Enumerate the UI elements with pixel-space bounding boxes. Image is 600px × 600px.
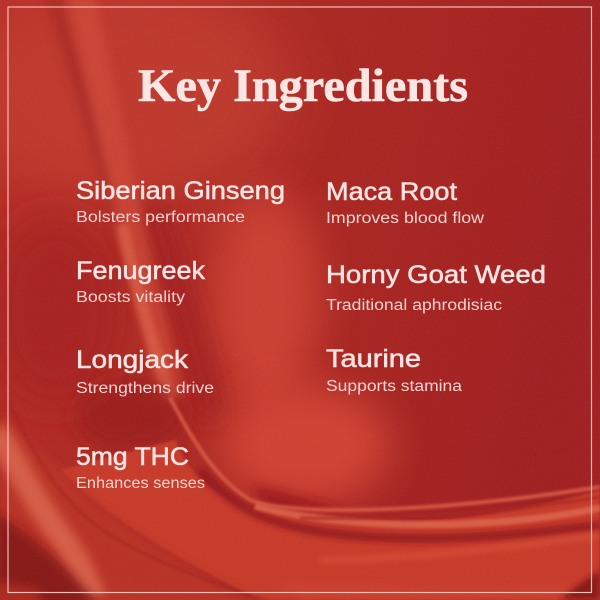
central light above swoosh — [220, 385, 390, 505]
ingredient: 5mg THC — [76, 443, 205, 492]
ingredient: Horny Goat Weed: Horny Goat Weed — [326, 261, 546, 289]
ingredient: Maca Root: Maca Root — [326, 178, 457, 206]
upper-left light sheen — [0, 0, 290, 205]
ingredient: Maca Root — [326, 178, 485, 227]
ingredient: 5mg THC: Enhances senses — [76, 475, 205, 492]
lower satin below swoosh — [60, 440, 600, 600]
ingredient: Horny Goat Weed — [326, 261, 546, 314]
ingredient: Longjack: Longjack — [76, 346, 189, 374]
ingredient: Siberian Ginseng: Bolsters performance — [76, 209, 245, 226]
right column ingredients — [326, 178, 546, 395]
ingredient: Fenugreek — [76, 257, 206, 306]
ingredient: Maca Root: Improves blood flow — [326, 210, 485, 227]
ingredient: Horny Goat Weed: Traditional aphrodisiac — [326, 297, 502, 314]
ingredient: Fenugreek: Fenugreek — [76, 257, 206, 285]
ingredient: Fenugreek: Boosts vitality — [76, 289, 185, 306]
ingredient: 5mg THC: 5mg THC — [76, 443, 189, 471]
left column ingredients — [76, 177, 285, 492]
lower-left folds — [0, 415, 270, 600]
ingredient: Taurine — [326, 345, 462, 395]
swoosh creases — [170, 398, 600, 510]
ingredient: Taurine: Taurine — [326, 345, 421, 373]
dark hollow behind swoosh — [75, 380, 185, 450]
ingredient: Longjack — [76, 346, 214, 397]
ingredient: Longjack: Strengthens drive — [76, 380, 214, 397]
title: Key Ingredients — [138, 60, 468, 112]
diagonal folds upper left — [50, 0, 122, 240]
ingredient: Siberian Ginseng: Siberian Ginseng — [76, 177, 285, 205]
ingredient: Taurine: Supports stamina — [326, 378, 462, 395]
ingredient: Siberian Ginseng — [76, 177, 285, 226]
